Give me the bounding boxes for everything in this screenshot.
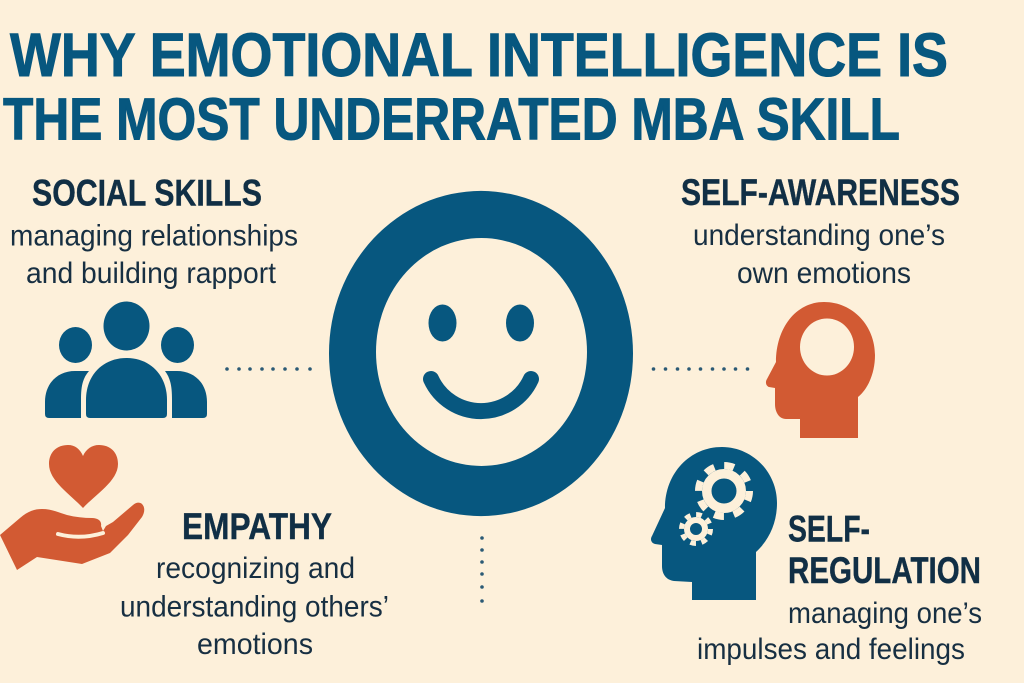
panel: self-regulation text: SELF- [788,508,870,550]
panel: social skills text: and building rapport [26,257,277,290]
title [3,21,948,152]
panel: self-regulation text: REGULATION [788,550,981,591]
panel: social skills text [10,172,298,290]
panel: social skills text: SOCIAL SKILLS [32,172,262,214]
panel: self-regulation text: managing one’s [788,597,982,630]
panel: empathy text: EMPATHY [182,506,332,547]
dotted connector: bottom [480,536,484,603]
icon: smiley face [329,191,633,516]
panel: self-regulation text [697,508,982,666]
panel: empathy text: emotions [197,628,313,661]
icon: head with circle (self-awareness) [766,302,875,438]
icon: people group [45,302,207,418]
panel: self-awareness text: SELF-AWARENESS [681,172,960,213]
panel: self-awareness text: understanding one’s [693,219,945,252]
panel: self-regulation text: impulses and feelings [697,633,965,666]
panel: social skills text: managing relationships [10,220,298,252]
panel: empathy text: recognizing and [156,552,355,585]
panel: self-awareness text [681,172,960,290]
panel: self-awareness text: own emotions [737,257,911,290]
panel: empathy text [120,506,389,661]
icon: head with gears (self-regulation) [651,447,777,600]
dotted connector: right [652,367,749,371]
icon: heart in hand (empathy) [0,445,144,570]
panel: empathy text: understanding others’ [120,590,389,624]
dotted connector: left [225,367,312,371]
